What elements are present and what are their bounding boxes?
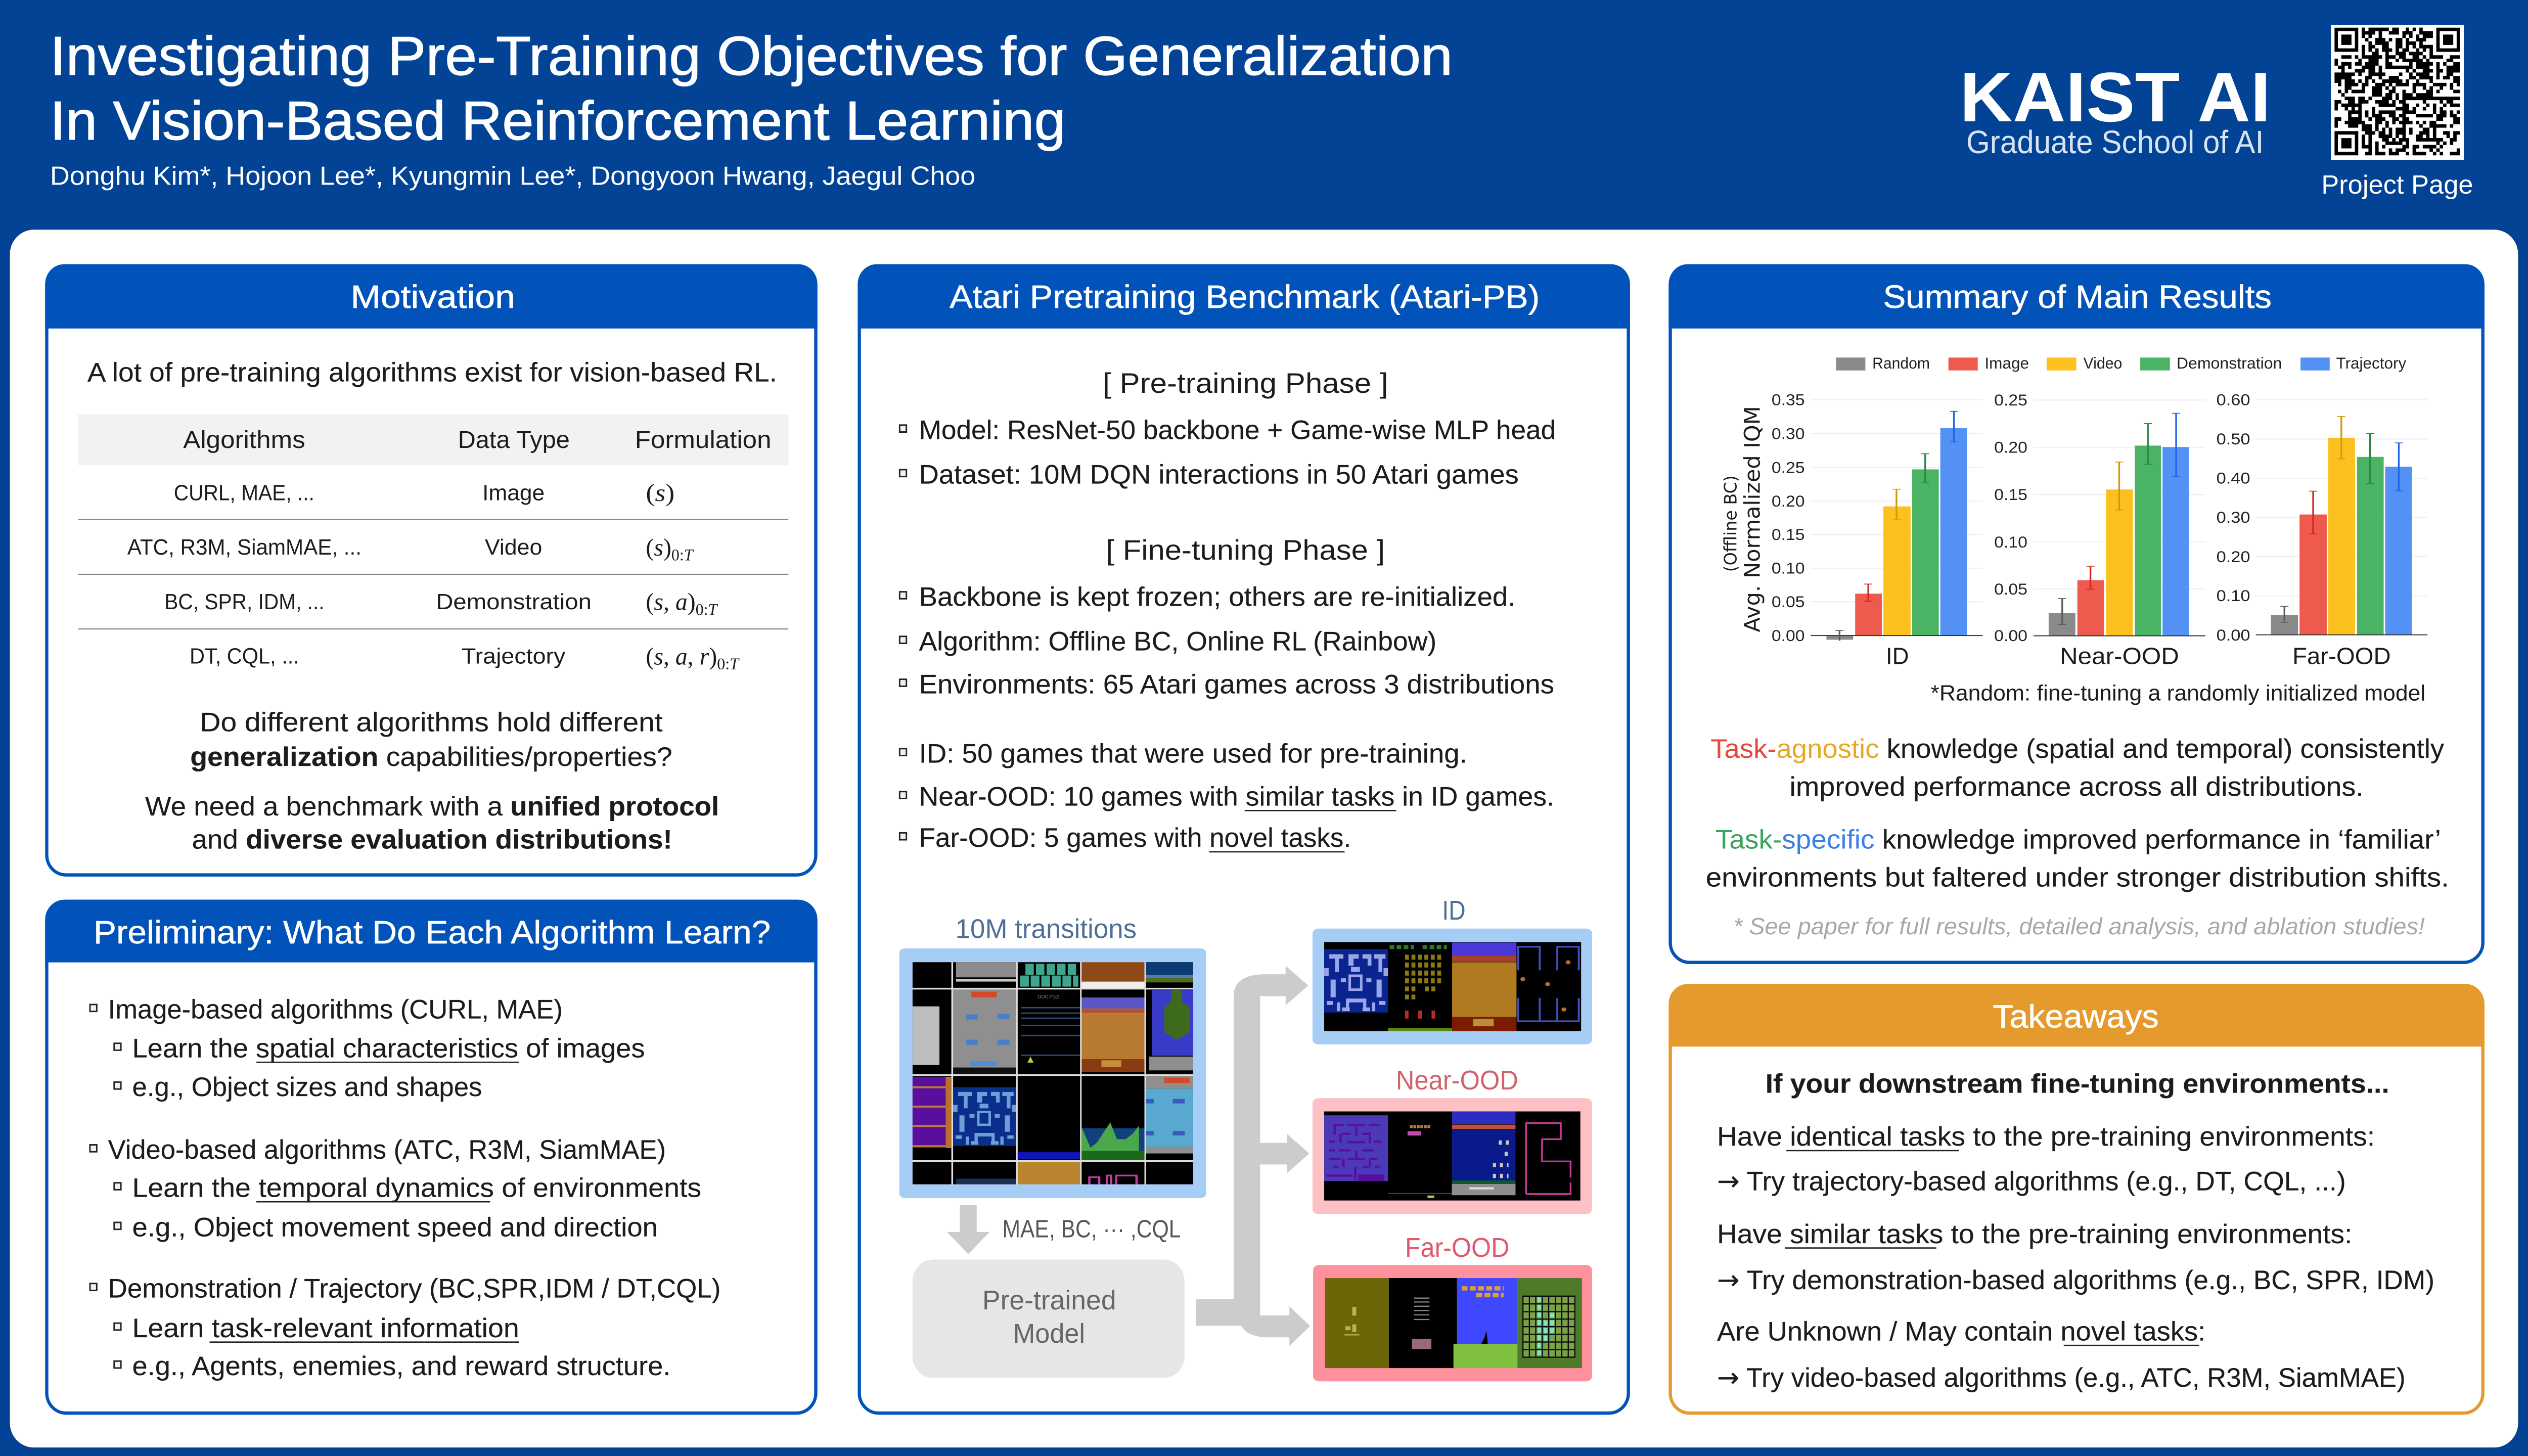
bar chart: Far-OOD: 0.00 [2217,626,2250,644]
list: video-based: Video-based algorithms (ATC, R3M, SiamMAE) [108,1135,666,1165]
bar chart: ID: 0.20 [1772,492,1805,510]
fine-tuning phase: Backbone is kept frozen; others are re-initialized. [919,582,1515,612]
pre-training phase: Dataset: 10M DQN interactions in 50 Atari games [919,460,1519,490]
y axis title [1721,406,1765,632]
bar chart: Near-OOD: 0.15 [1994,486,2027,504]
chart legend: Video [2084,354,2122,372]
list: video-based [90,1135,701,1243]
bar chart: Near-OOD: 0.05 [1994,580,2027,598]
question text [190,708,672,772]
finding: task-agnostic: Task- agnostic knowledge (spatial and temporal) consistently [1710,734,2445,764]
project page label: Project Page [2321,169,2473,199]
arrow: branches to distributions [1196,966,1310,1346]
table: algorithms: Video [485,535,542,560]
list: demonstration and trajectory: e.g., Agents, enemies, and reward structure. [132,1351,671,1381]
logo: KAIST AI: KAIST AI [1960,59,2271,136]
title: Investigating Pre-Training Objectives for Generalization [50,25,1453,86]
image mosaic: pre-training games: 000752 [1037,994,1060,999]
table: algorithms: Trajectory [462,644,566,669]
label: ID: ID [1442,895,1466,926]
heading: preliminary: Preliminary: What Do Each Algorithm Learn? [94,915,771,950]
label: Far-OOD: Far-OOD [1405,1233,1509,1263]
table: algorithms: (s, a) [646,588,696,616]
bar chart: ID: 0.25 [1772,459,1805,477]
box: pre-trained model [913,1259,1185,1378]
finding: task-specific: environments but faltered under stronger distribution shifts. [1706,863,2449,893]
bar chart: Near-OOD: 0.10 [1994,533,2027,551]
paper note: * See paper for full results, detailed analysis, and ablation studies! [1733,913,2425,939]
panel: atari pretraining benchmark [857,264,1630,1413]
takeaway: similar tasks: → Try demonstration-based algorithms (e.g., BC, SPR, IDM) [1717,1265,2434,1296]
bar chart: ID: 0.10 [1772,559,1805,577]
bar chart: Near-OOD: 0.25 [1994,391,2027,409]
table: algorithms: Demonstration [436,589,592,614]
diagram: benchmark pipeline [899,895,1592,1381]
authors: Donghu Kim*, Hojoon Lee*, Kyungmin Lee*, Dongyoon Hwang, Jaegul Choo [50,161,975,191]
chart legend [1836,354,2407,372]
list: image-based: Learn the spatial characteristics of images [132,1034,645,1064]
label: 10M transitions: 10M transitions [956,914,1137,944]
table: algorithms: Algorithms [183,426,305,453]
chart legend: Trajectory [2336,354,2407,372]
list: demonstration and trajectory: Demonstration / Trajectory (BC,SPR,IDM / DT,CQL) [108,1274,720,1304]
bar chart: Far-OOD: 0.10 [2217,587,2250,605]
logo: KAIST AI: Graduate School of AI [1966,124,2264,160]
y axis title: Avg. Normalized IQM [1740,406,1765,632]
bar chart: Near-OOD: 0.00 [1994,627,2027,645]
heading: summary: Summary of Main Results [1883,279,2272,315]
chart legend: Demonstration [2177,354,2282,372]
bar chart: Far-OOD [2217,391,2427,669]
bar chart: ID: 0.15 [1772,526,1805,543]
list: image-based: e.g., Object sizes and shapes [132,1073,482,1102]
list: demonstration and trajectory [90,1274,720,1381]
takeaway: novel tasks: → Try video-based algorithms (e.g., ATC, R3M, SiamMAE) [1717,1362,2406,1393]
heading: summary [1668,264,2485,329]
takeaway: identical tasks: Have identical tasks to the pre-training environments: [1717,1122,2375,1152]
finding: task-specific [1706,825,2449,893]
bar chart: ID: 0.05 [1772,593,1805,611]
chart footnote: *Random: fine-tuning a randomly initialized model [1931,681,2425,706]
bar chart: Far-OOD: 0.40 [2217,469,2250,487]
game strip: Far-OOD [1313,1265,1592,1381]
heading: motivation [45,264,818,329]
table: algorithms: 0:T [696,600,717,618]
box: pre-trained model: Pre-trained [982,1285,1116,1315]
question text: generalization capabilities/properties? [190,743,672,772]
game strip: Near-OOD [1313,1098,1592,1214]
panel: takeaways [1668,984,2485,1413]
heading: atari-pb: Atari Pretraining Benchmark (Atari-PB) [950,279,1540,315]
takeaway: novel tasks: Are Unknown / May contain novel tasks: [1717,1317,2205,1347]
bar chart: ID: 0.30 [1772,425,1805,443]
takeaway question: If your downstream fine-tuning environments... [1766,1069,2389,1099]
pre-training phase: [ Pre-training Phase ] [1103,368,1388,399]
conclusion text: and diverse evaluation distributions! [192,825,672,855]
list: video-based: Learn the temporal dynamics of environments [132,1173,701,1203]
fine-tuning phase: Environments: 65 Atari games across 3 distributions [919,670,1554,700]
conclusion text [145,792,719,855]
panel: summary of main results [1668,264,2485,963]
table: algorithms: Data Type [458,426,570,453]
fine-tuning phase [899,534,1554,700]
heading: takeaways [1668,984,2485,1046]
table: algorithms: 0:T [717,655,739,673]
heading: preliminary [45,900,818,963]
bar chart: ID [1772,391,1982,669]
takeaway: identical tasks: → Try trajectory-based algorithms (e.g., DT, CQL, ...) [1717,1166,2346,1197]
table: algorithms: (s) [646,480,674,507]
chart legend: Image [1984,354,2029,372]
bar chart: ID: 0.00 [1772,627,1805,645]
evaluation distributions: ID: 50 games that were used for pre-training. [919,739,1467,769]
bar chart: Near-OOD: 0.20 [1994,438,2027,457]
table: algorithms: (s, a, r) [646,643,717,670]
list: video-based: e.g., Object movement speed and direction [132,1213,658,1243]
evaluation distributions: Far-OOD: 5 games with novel tasks. [919,824,1351,853]
table: algorithms: 0:T [671,545,693,564]
intro text: A lot of pre-training algorithms exist for vision-based RL. [87,358,777,387]
pre-training phase: Model: ResNet-50 backbone + Game-wise MLP head [919,416,1556,445]
fine-tuning phase: [ Fine-tuning Phase ] [1106,534,1385,566]
table: algorithms: (s) [646,534,671,561]
evaluation distributions [899,739,1554,853]
label: Near-OOD: Near-OOD [1396,1066,1518,1096]
bar chart: Near-OOD [1994,391,2205,669]
table: algorithms: DT, CQL, ... [190,644,299,669]
bar chart: ID: 0.35 [1772,391,1805,409]
panel: preliminary [45,900,818,1413]
bar chart: Far-OOD: Far-OOD [2292,643,2391,669]
y axis title: (Offline BC) [1721,475,1740,572]
bar chart: Far-OOD: 0.30 [2217,509,2250,526]
takeaway: similar tasks [1717,1219,2434,1296]
bar chart: Far-OOD: 0.60 [2217,391,2250,409]
title: In Vision-Based Reinforcement Learning [50,90,1066,151]
arrow: down to pre-trained model [947,1205,989,1254]
bar chart: ID: ID [1886,643,1909,669]
takeaway: similar tasks: Have similar tasks to the pre-training environments: [1717,1219,2352,1249]
conclusion text: We need a benchmark with a unified protocol [145,792,719,822]
table: algorithms: Image [482,481,545,506]
heading: takeaways: Takeaways [1993,999,2159,1035]
list: demonstration and trajectory: Learn task-relevant information [132,1313,519,1343]
finding: task-specific: Task- specific knowledge improved performance in ‘familiar’ [1716,825,2441,855]
table: algorithms [78,415,788,673]
heading: motivation: Motivation [351,279,515,315]
question text: Do different algorithms hold different [200,708,663,738]
QR code [2331,25,2464,160]
panel: motivation [45,264,818,875]
bar chart: Far-OOD: 0.50 [2217,430,2250,448]
title [50,25,1453,151]
image mosaic: pre-training games [899,948,1206,1198]
chart legend: Random [1872,354,1930,372]
finding: task-agnostic [1710,734,2445,802]
table: algorithms: ATC, R3M, SiamMAE, ... [127,535,362,560]
heading: atari-pb [857,264,1630,329]
bar chart: Near-OOD: Near-OOD [2060,643,2179,669]
list: image-based: Image-based algorithms (CURL, MAE) [108,995,563,1025]
fine-tuning phase: Algorithm: Offline BC, Online RL (Rainbow) [919,627,1436,657]
table: algorithms: Formulation [635,426,772,453]
evaluation distributions: Near-OOD: 10 games with similar tasks in ID games. [919,782,1554,812]
takeaway: novel tasks [1717,1317,2406,1393]
pre-training phase [899,368,1556,490]
takeaway: identical tasks [1717,1122,2375,1197]
table: algorithms: CURL, MAE, ... [174,481,314,506]
box: pre-trained model: Model [1013,1318,1085,1349]
list: image-based [90,995,645,1102]
finding: task-agnostic: improved performance across all distributions. [1790,772,2364,802]
game strip: ID [1313,929,1592,1044]
table: algorithms: BC, SPR, IDM, ... [164,589,325,614]
bar chart: Far-OOD: 0.20 [2217,548,2250,566]
label: algorithms: MAE, BC, ··· ,CQL [1002,1215,1181,1243]
